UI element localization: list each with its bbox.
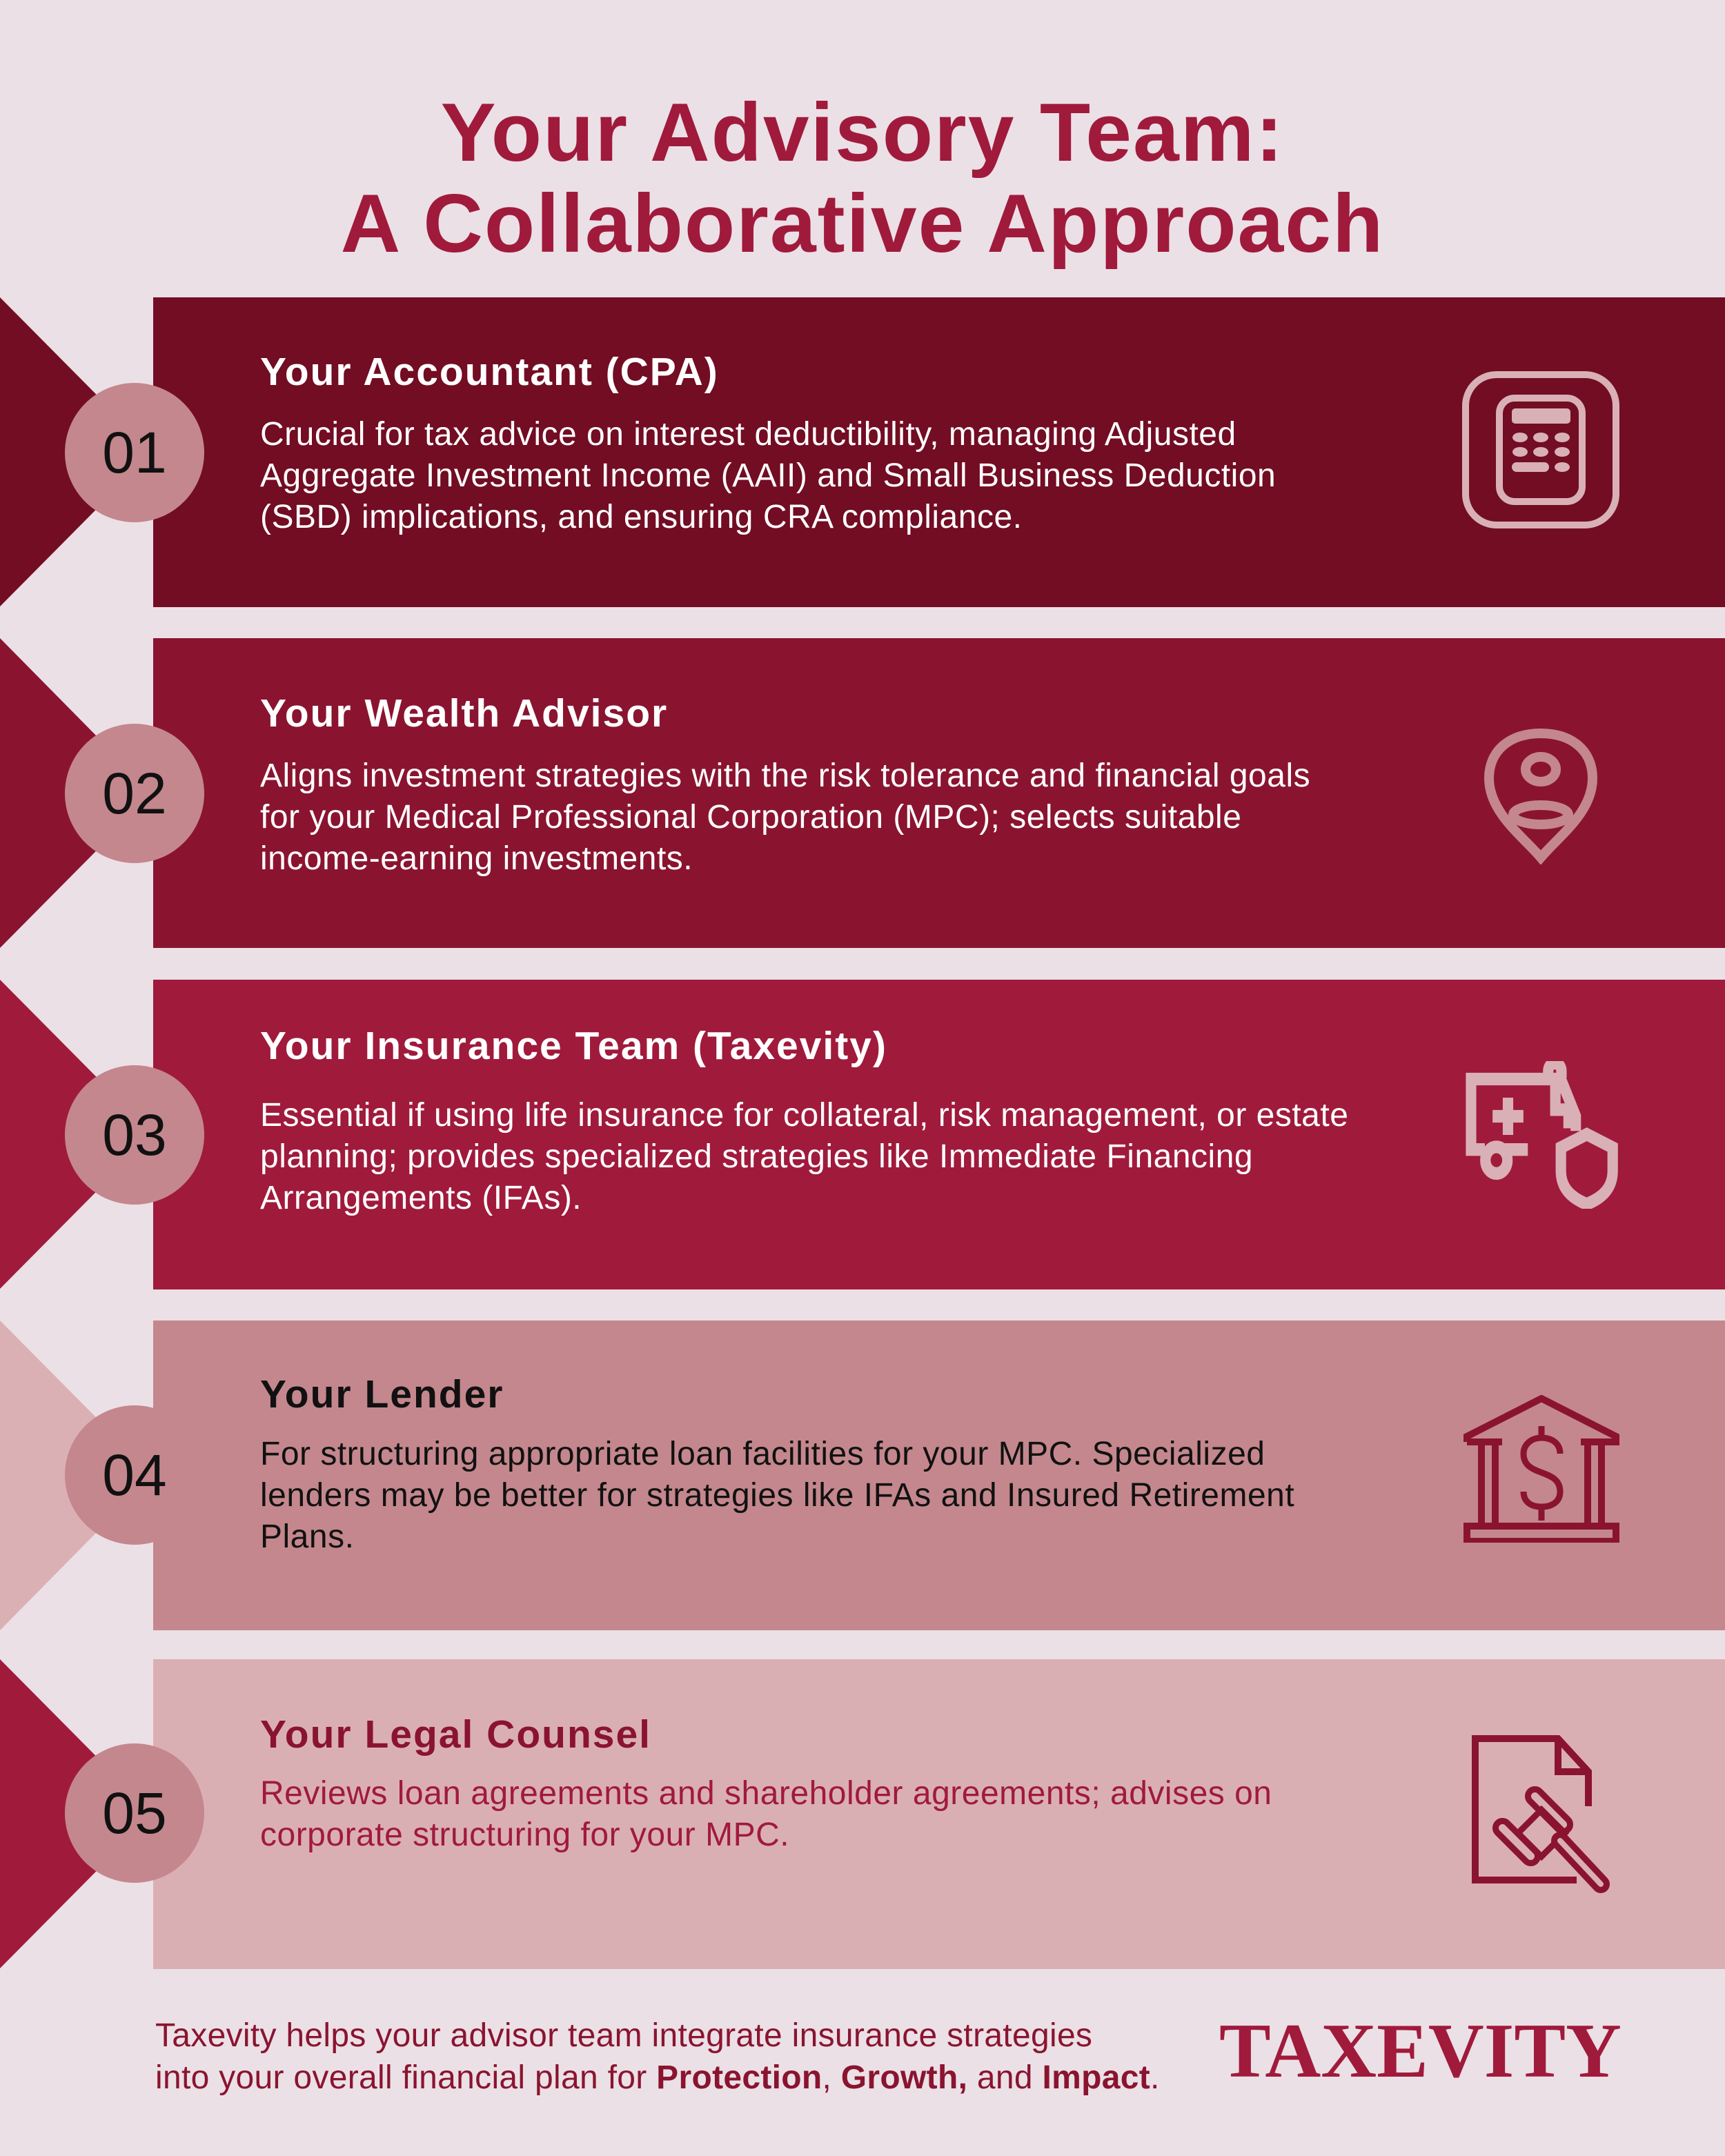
text: insurance team <box>260 1097 1348 1216</box>
panel: legal counsel <box>153 1659 1725 1969</box>
badge 02 <box>65 724 204 863</box>
heading: lender: Your Lender <box>260 1372 504 1416</box>
heading: wealth advisor: Your Wealth Advisor <box>260 691 668 735</box>
text: lender <box>260 1436 1294 1555</box>
badge 03: 03 <box>102 1102 167 1167</box>
footer text: into your overall financial plan for Protection, Growth, and Impact. <box>155 2059 1160 2096</box>
title: Your Advisory Team: <box>441 86 1284 179</box>
text: lender: lenders may be better for strategies like IFAs and Insured Retirement <box>260 1477 1294 1514</box>
icon: document with gavel <box>1472 1735 1610 1893</box>
badge 04 <box>65 1405 204 1545</box>
chevrons <box>0 297 97 1968</box>
badge 05: 05 <box>102 1781 167 1846</box>
text: insurance team: Essential if using life insurance for collateral, risk management, or estate <box>260 1097 1348 1134</box>
icon: person pin <box>1484 729 1597 864</box>
text: legal counsel <box>260 1775 1272 1853</box>
badge 04: 04 <box>102 1443 167 1507</box>
badge 01 <box>65 383 204 522</box>
text: wealth advisor: for your Medical Professional Corporation (MPC); selects suitable <box>260 799 1241 835</box>
panel: wealth advisor <box>153 638 1725 948</box>
heading: insurance team: Your Insurance Team (Taxevity) <box>260 1024 887 1068</box>
icon: calculator <box>1462 371 1619 528</box>
panel: lender <box>153 1321 1725 1630</box>
text: legal counsel: Reviews loan agreements and shareholder agreements; advises on <box>260 1775 1272 1812</box>
badge 01: 01 <box>102 420 167 485</box>
badge 03 <box>65 1065 204 1205</box>
text: wealth advisor: Aligns investment strategies with the risk tolerance and financial goals <box>260 758 1310 794</box>
text: accountant <box>260 416 1276 535</box>
panel: insurance team <box>153 980 1725 1289</box>
text: legal counsel: corporate structuring for your MPC. <box>260 1817 789 1853</box>
title <box>341 86 1384 270</box>
icon: bank <box>1463 1395 1619 1543</box>
text: wealth advisor: income-earning investments. <box>260 840 693 877</box>
footer text <box>155 2017 1160 2096</box>
badge 05 <box>65 1743 204 1883</box>
heading: legal counsel: Your Legal Counsel <box>260 1712 651 1757</box>
text: accountant: Crucial for tax advice on interest deductibility, managing Adjusted <box>260 416 1236 453</box>
footer text: Taxevity helps your advisor team integrate insurance strategies <box>155 2017 1092 2054</box>
heading: accountant: Your Accountant (CPA) <box>260 350 719 394</box>
text: lender: For structuring appropriate loan facilities for your MPC. Specialized <box>260 1436 1265 1472</box>
badge 02: 02 <box>102 761 167 826</box>
text: wealth advisor <box>260 758 1310 877</box>
text: accountant: Aggregate Investment Income (AAII) and Small Business Deduction <box>260 457 1276 494</box>
text: lender: Plans. <box>260 1519 354 1555</box>
text: insurance team: Arrangements (IFAs). <box>260 1180 582 1216</box>
logo: TAXEVITY <box>1219 2008 1621 2094</box>
icon: ambulance with shield <box>1466 1061 1618 1209</box>
panel: accountant <box>153 297 1725 607</box>
title: A Collaborative Approach <box>341 177 1384 270</box>
text: insurance team: planning; provides specialized strategies like Immediate Financing <box>260 1138 1253 1175</box>
text: accountant: (SBD) implications, and ensuring CRA compliance. <box>260 499 1022 535</box>
